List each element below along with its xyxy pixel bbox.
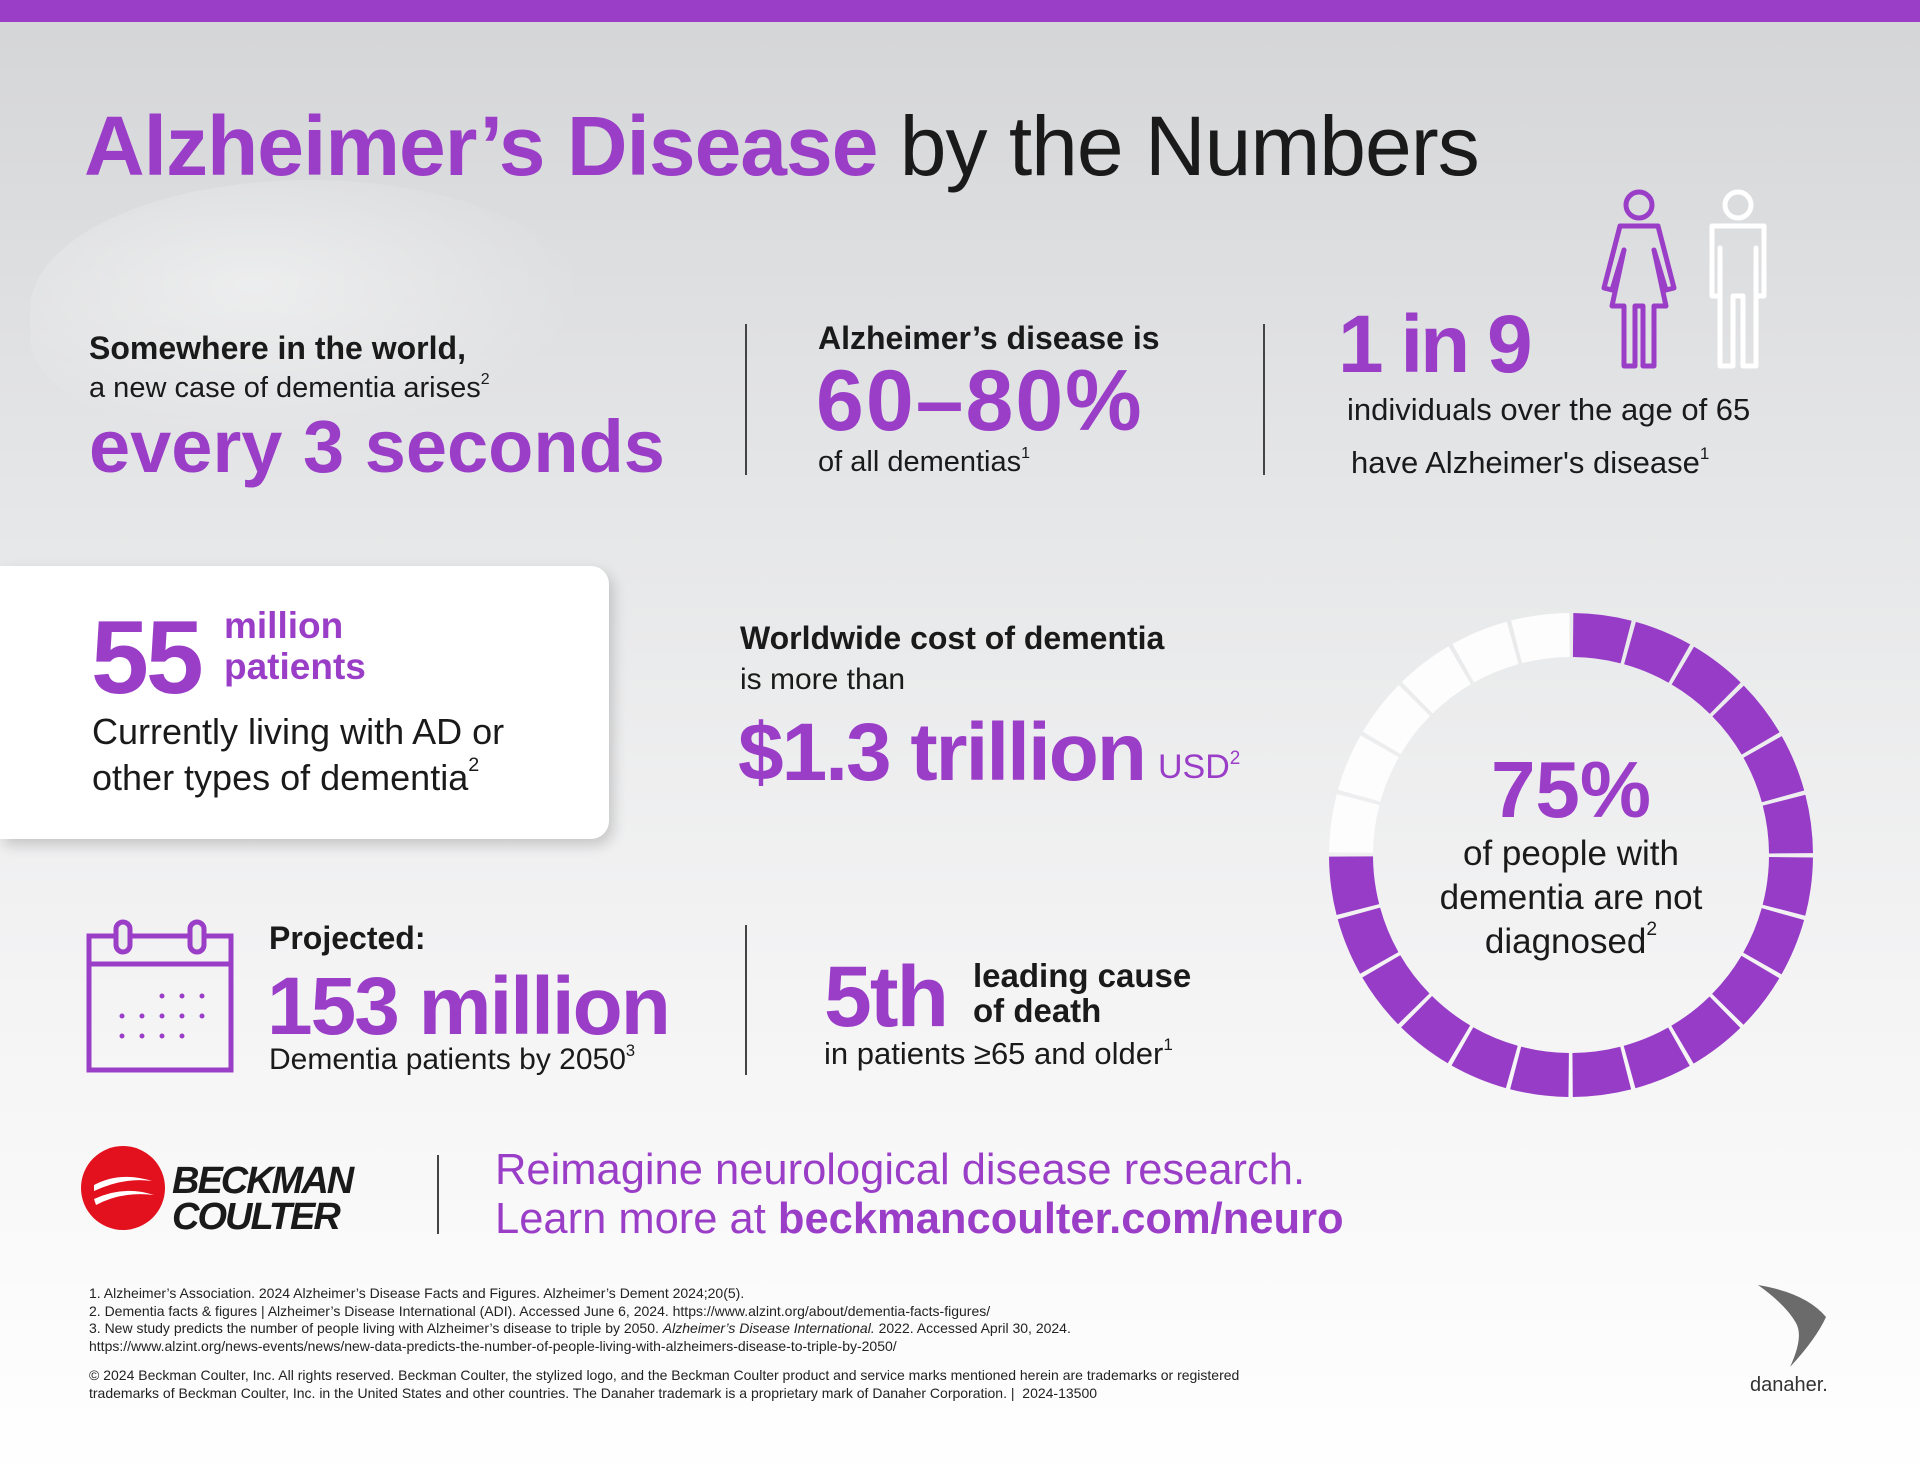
logo: Beckman Coulter: COULTER bbox=[172, 1196, 339, 1238]
icon: calendar bbox=[86, 920, 234, 1072]
panel: 55 million patients card: million bbox=[224, 605, 343, 646]
panel: 55 million patients card: 55 bbox=[91, 600, 201, 716]
stat: worldwide cost bbox=[738, 620, 1240, 798]
stat: 1 in 9 bbox=[1338, 299, 1750, 480]
stat: worldwide cost: $1.3 trillion bbox=[738, 707, 1145, 798]
title: Alzheimer’s Disease by the Numbers bbox=[84, 99, 1479, 193]
stat: 5th leading cause: of death bbox=[973, 992, 1101, 1029]
stat: 5th leading cause: 5th bbox=[824, 949, 947, 1045]
logo: Danaher bbox=[1750, 1285, 1828, 1396]
stat: 1 in 9: 1 in 9 bbox=[1338, 299, 1530, 390]
call to action: Learn more at beckmancoulter.com/neuro bbox=[495, 1195, 1344, 1243]
call to action: Reimagine neurological disease research. bbox=[495, 1146, 1305, 1194]
stat: 60-80%: Alzheimer’s disease is bbox=[818, 320, 1160, 356]
footnotes: https://www.alzint.org/news-events/news/new-data-predicts-the-number-of-people-living-with-alzheimers-disease-to-triple-by-2050/ bbox=[89, 1338, 897, 1354]
top bar bbox=[0, 0, 1920, 22]
stat: worldwide cost: USD2 bbox=[1158, 748, 1240, 786]
icon: woman and man figures bbox=[1602, 190, 1766, 368]
stat: 60-80% bbox=[816, 320, 1160, 478]
copyright bbox=[89, 1367, 1239, 1401]
stat: 1 in 9: individuals over the age of 65 bbox=[1347, 392, 1750, 427]
logo: Beckman Coulter bbox=[81, 1146, 355, 1238]
stat: 60-80%: 60–80% bbox=[816, 353, 1144, 449]
stat: 1 in 9: have Alzheimer's disease1 bbox=[1351, 444, 1709, 480]
call to action bbox=[495, 1146, 1344, 1243]
panel: 55 million patients card: patients bbox=[224, 646, 366, 687]
copyright: trademarks of Beckman Coulter, Inc. in the United States and other countries. The Danaher trademark is a proprietary mark of Danaher Corporation. | 2024-13500 bbox=[89, 1384, 1097, 1400]
footnotes bbox=[89, 1285, 1071, 1354]
footnotes: 2. Dementia facts & figures | Alzheimer’s Disease International (ADI). Accessed June 6, 2024. https://www.alzint.org/about/dementia-facts-figures/ bbox=[89, 1302, 990, 1318]
stat: projected 153 million: Dementia patients by 20503 bbox=[269, 1042, 635, 1076]
stat: every 3 seconds: a new case of dementia arises2 bbox=[89, 371, 490, 404]
stat: 60-80%: of all dementias1 bbox=[818, 445, 1030, 478]
chart: donut 75% bbox=[1329, 613, 1813, 1097]
stat: projected 153 million: 153 million bbox=[267, 961, 669, 1052]
stat: projected 153 million: Projected: bbox=[269, 920, 425, 956]
stat: 5th leading cause: in patients ≥65 and older1 bbox=[824, 1035, 1173, 1071]
footnotes: 3. New study predicts the number of people living with Alzheimer’s disease to triple by 2050. Alzheimer’s Disease International. 2022. Accessed April 30, 2024. bbox=[89, 1320, 1071, 1336]
stat: every 3 seconds bbox=[89, 330, 665, 488]
stat: worldwide cost: is more than bbox=[740, 663, 905, 696]
logo: Beckman Coulter: BECKMAN bbox=[172, 1160, 352, 1202]
footnotes: 1. Alzheimer’s Association. 2024 Alzheimer’s Disease Facts and Figures. Alzheimer’s Dement 2024;20(5). bbox=[89, 1285, 744, 1301]
logo: Danaher: danaher. bbox=[1750, 1374, 1828, 1396]
panel: 55 million patients card: Currently living with AD or bbox=[92, 711, 504, 752]
stat: projected 153 million bbox=[267, 920, 669, 1076]
stat: 5th leading cause: leading cause bbox=[973, 957, 1191, 994]
panel: 55 million patients card: other types of dementia2 bbox=[92, 754, 479, 798]
copyright: © 2024 Beckman Coulter, Inc. All rights reserved. Beckman Coulter, the stylized logo, and the Beckman Coulter product and service marks mentioned herein are trademarks or registered bbox=[89, 1367, 1239, 1383]
chart: donut 75%: diagnosed2 bbox=[1485, 919, 1657, 961]
chart: donut 75%: dementia are not bbox=[1440, 878, 1702, 917]
chart: donut 75%: 75% bbox=[1491, 745, 1651, 834]
stat: every 3 seconds: every 3 seconds bbox=[89, 405, 665, 488]
panel: 55 million patients card bbox=[0, 566, 609, 839]
background world map bbox=[30, 180, 590, 440]
stat: every 3 seconds: Somewhere in the world, bbox=[89, 330, 466, 366]
stat: worldwide cost: Worldwide cost of dementia bbox=[740, 620, 1164, 656]
stat: 5th leading cause bbox=[824, 949, 1191, 1071]
chart: donut 75%: of people with bbox=[1463, 834, 1679, 873]
